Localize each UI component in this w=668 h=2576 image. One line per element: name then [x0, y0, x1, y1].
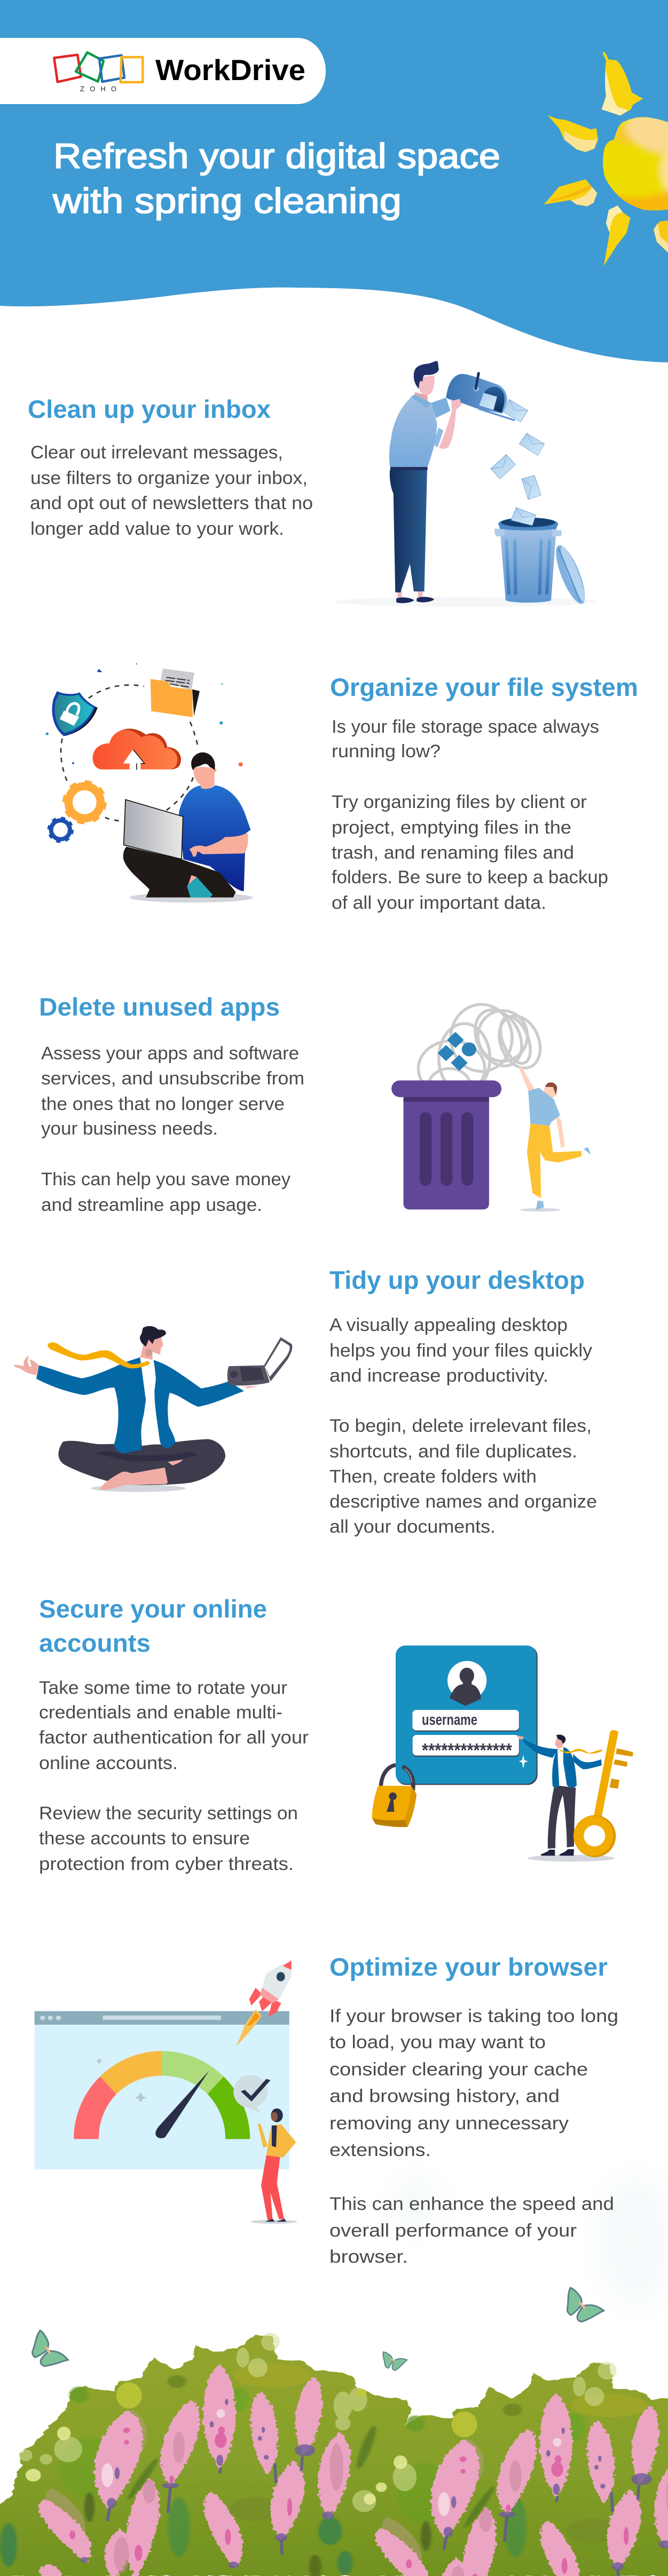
body text: Review the security settings on [39, 1803, 298, 1824]
lavender flowers, second cluster [375, 2392, 668, 2576]
body text [41, 1043, 304, 1215]
icon: butterfly left [33, 2331, 68, 2366]
body text: Try organizing files by client or [332, 792, 587, 812]
body text: browser. [329, 2247, 408, 2267]
body text: credentials and enable multi- [39, 1702, 282, 1723]
body text: folders. Be sure to keep a backup [332, 867, 608, 887]
icon: butterfly right [563, 2282, 605, 2324]
body text: overall performance of your [329, 2221, 577, 2241]
panel: optimize your browser [35, 1953, 668, 2305]
body text: Assess your apps and software [41, 1043, 299, 1064]
Zoho wordmark: ZOHO [80, 85, 116, 93]
body text [329, 1315, 597, 1537]
panel: secure your online accounts [39, 1595, 633, 1874]
body text: Is your file storage space always [332, 717, 599, 737]
body text: helps you find your files quickly [329, 1341, 592, 1361]
heading: Secure your online [39, 1595, 267, 1623]
title: Refresh your digital space [53, 136, 500, 176]
pale bokeh blobs [19, 2333, 616, 2512]
body text: and streamline app usage. [41, 1195, 262, 1215]
body text: descriptive names and organize [329, 1492, 597, 1512]
panel: header [0, 0, 668, 362]
body text: protection from cyber threats. [39, 1854, 294, 1874]
illustration: login card, padlock and key [372, 1645, 633, 1861]
header wave background [0, 0, 668, 362]
body text: A visually appealing desktop [329, 1315, 568, 1335]
heading: Tidy up your desktop [329, 1266, 585, 1294]
heading: Delete unused apps [39, 993, 280, 1021]
bright yellow bokeh spots [26, 2427, 407, 2504]
body text [332, 717, 608, 913]
title [52, 136, 500, 220]
heading: Organize your file system [330, 673, 638, 701]
icon: watercolor sun [544, 52, 668, 266]
body text: to load, you may want to [329, 2032, 546, 2052]
body text: Take some time to rotate your [39, 1678, 287, 1698]
body text: running low? [332, 741, 441, 762]
panel: organize your file system [46, 663, 638, 913]
username field label: username [422, 1711, 477, 1729]
title: with spring cleaning [52, 181, 402, 220]
body text: and browsing history, and [329, 2086, 560, 2106]
faint watercolor smudge [392, 2177, 668, 2305]
illustration: man emptying mailbox into trash can [334, 361, 597, 607]
illustration: person with laptop, cloud, shield and gears [46, 663, 253, 902]
body text: Clear out irrelevant messages, [30, 442, 283, 463]
body text: all your documents. [329, 1517, 496, 1537]
body text: and opt out of newsletters that no [30, 493, 313, 513]
body text: longer add value to your work. [30, 519, 284, 539]
body text: use filters to organize your inbox, [30, 468, 308, 488]
password field: ************** [422, 1739, 512, 1761]
body text: online accounts. [39, 1753, 178, 1773]
yellow-green highlights [116, 2383, 477, 2437]
body text: shortcuts, and file duplicates. [329, 1441, 577, 1462]
body text: and increase productivity. [329, 1366, 548, 1386]
meadow colour washes [0, 2364, 648, 2576]
body text: consider clearing your cache [329, 2059, 588, 2080]
body text: extensions. [329, 2140, 431, 2160]
body text: This can help you save money [41, 1169, 290, 1190]
body text: trash, and renaming files and [332, 843, 574, 863]
icon: butterfly middle [379, 2344, 409, 2374]
lavender flowers, first cluster [39, 2364, 350, 2576]
panel: delete unused apps [39, 993, 591, 1215]
heading: Optimize your browser [329, 1953, 608, 1981]
body text: This can enhance the speed and [329, 2194, 614, 2214]
body text [39, 1678, 309, 1874]
WorkDrive wordmark: WorkDrive [155, 53, 305, 86]
illustration: purple trash can with person [391, 1003, 591, 1211]
body text [329, 2006, 618, 2267]
body text: services, and unsubscribe from [41, 1068, 304, 1089]
body text: To begin, delete irrelevant files, [329, 1416, 592, 1436]
illustration: meditating businessman with laptop [13, 1326, 292, 1492]
heading [39, 1595, 267, 1657]
body text: removing any unnecessary [329, 2113, 569, 2134]
heading: Clean up your inbox [28, 395, 271, 423]
body text: these accounts to ensure [39, 1828, 250, 1849]
body text: the ones that no longer serve [41, 1094, 285, 1114]
panel: tidy up your desktop [13, 1266, 597, 1537]
illustration: lavender meadow with butterflies [0, 2282, 668, 2576]
heading: accounts [39, 1629, 151, 1657]
body text [30, 442, 313, 539]
body text: of all your important data. [332, 893, 546, 913]
body text: project, emptying files in the [332, 818, 571, 838]
illustration: browser window with speedometer and rocket [35, 1960, 297, 2224]
panel: clean up your inbox [28, 361, 597, 607]
icon: Zoho logo squares [54, 52, 143, 82]
body text: If your browser is taking too long [329, 2006, 618, 2026]
body text: your business needs. [41, 1119, 218, 1139]
body text: Then, create folders with [329, 1467, 537, 1487]
meadow silhouette [0, 2335, 668, 2576]
body text: factor authentication for all your [39, 1727, 309, 1748]
logo pill [0, 38, 326, 104]
